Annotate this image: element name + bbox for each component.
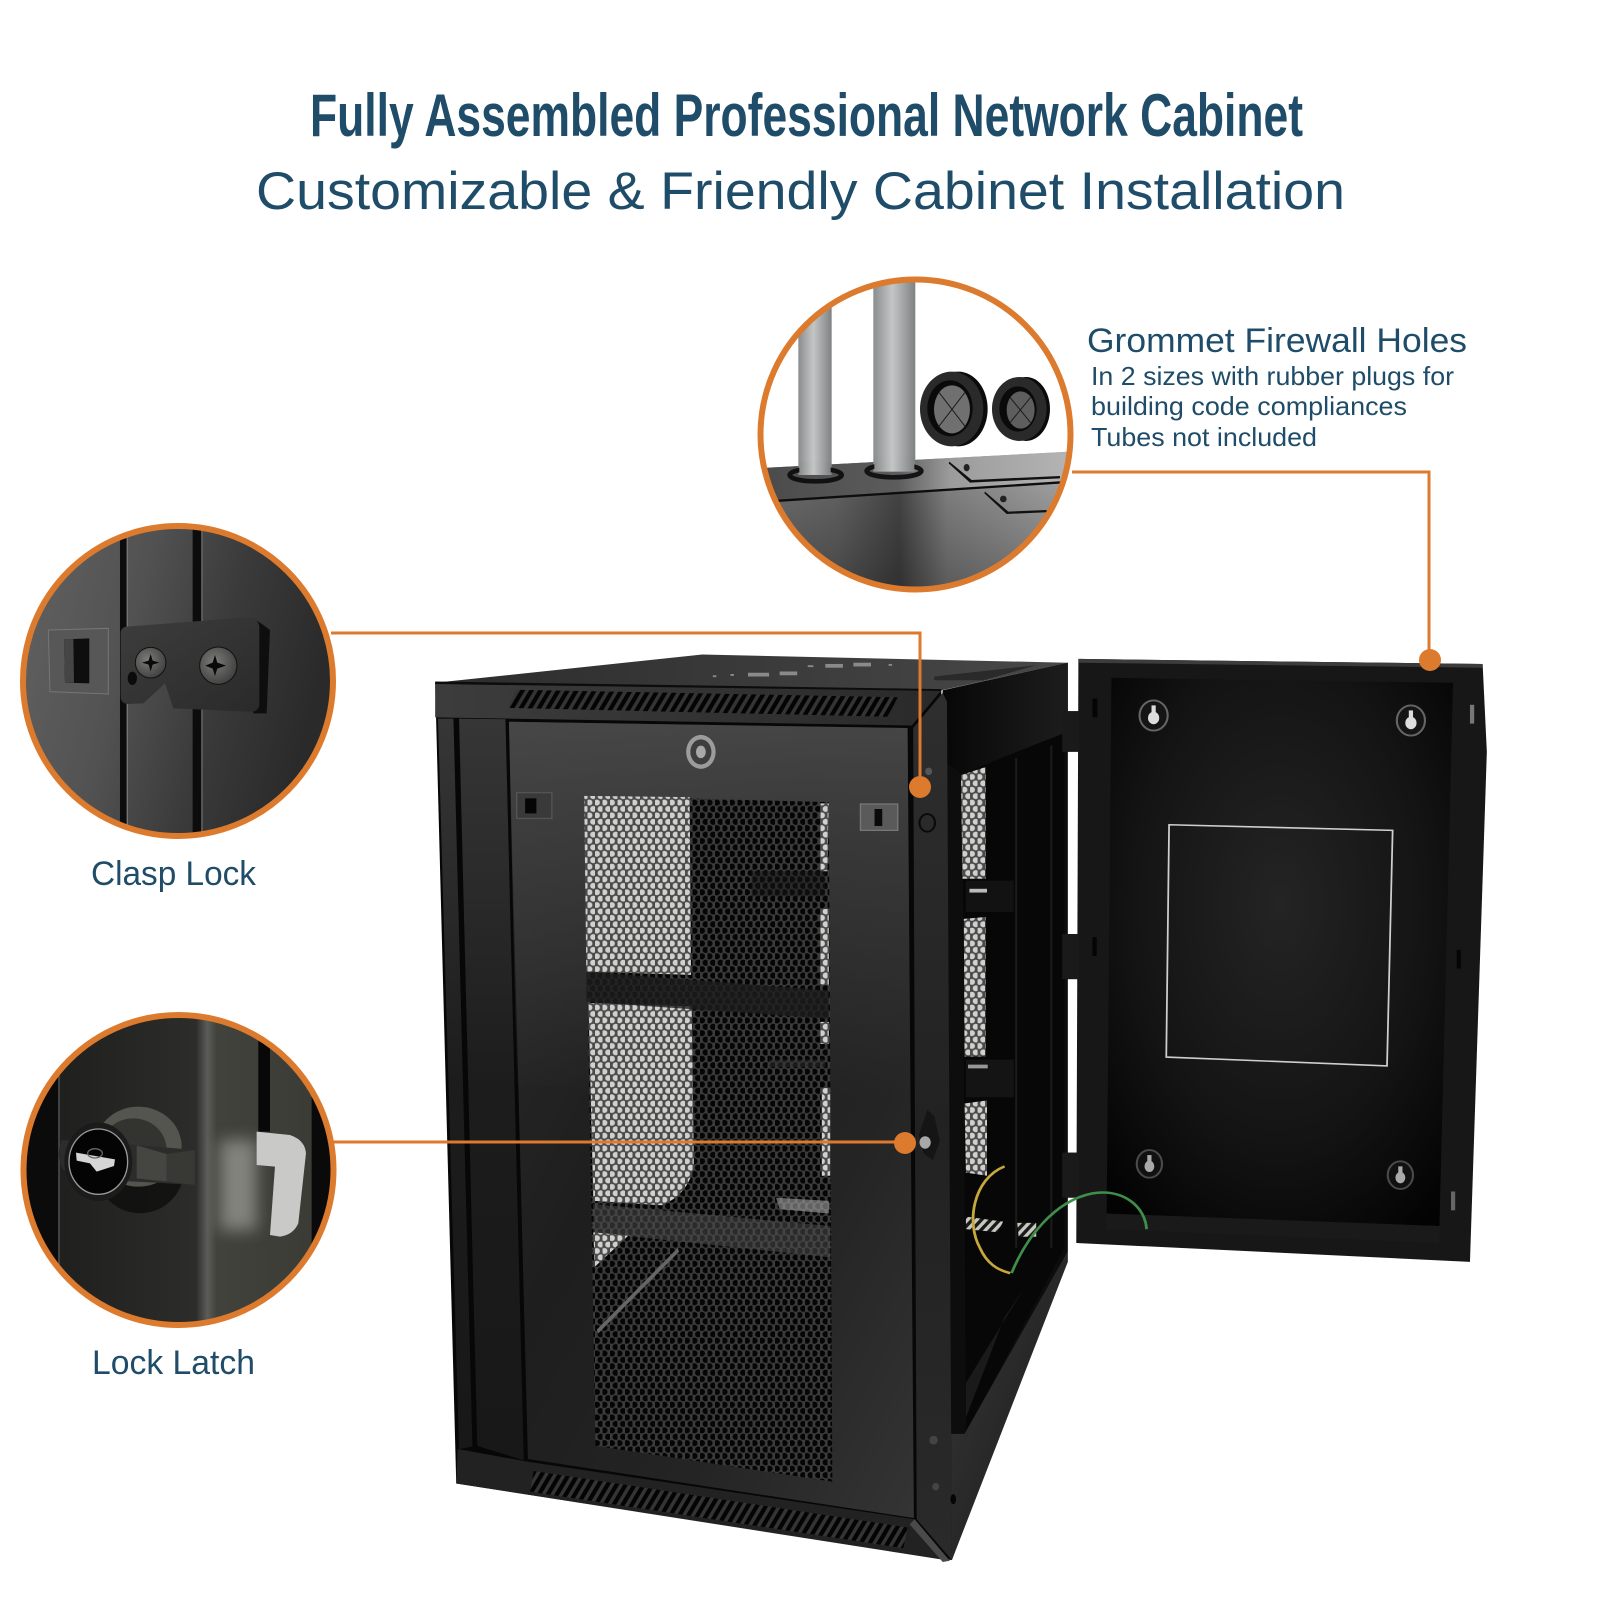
door handles [517,793,898,830]
small grommet [992,377,1050,441]
backing [435,683,952,1560]
pillar hardware [920,814,935,832]
label: clasp lock: Clasp Lock [91,855,257,893]
grommet description line 3: Tubes not included [1091,422,1317,452]
top band [435,683,941,726]
interior mesh strips [961,767,986,879]
grommet text block [1087,322,1467,452]
open side door of the cabinet [1076,659,1487,1262]
door knob [919,1110,940,1160]
door lock [686,735,716,769]
connector dot: clasp lock [909,776,931,798]
label: lock latch: Lock Latch [92,1344,255,1382]
connector line: grommet holes [1072,472,1429,660]
door mesh [584,796,832,1482]
grommet description line 2: building code compliances [1091,391,1407,421]
base [456,1449,950,1561]
grommet heading: Grommet Firewall Holes [1087,322,1467,360]
connector line: clasp lock [331,633,920,787]
front cabinet body [435,655,1147,1562]
keyhole mounts [1137,700,1425,1189]
callout: grommet firewall holes circle [755,275,1080,595]
callout: lock latch circle [20,1010,340,1330]
side wall [943,663,1068,1560]
door [509,722,914,1518]
large grommet [920,372,988,446]
connector dot: grommet holes [1419,649,1441,671]
callout: clasp lock circle [20,520,340,840]
left frames [438,719,472,1449]
wires [973,1166,1147,1273]
right pillar [913,693,952,1560]
knockout panel outline [1166,825,1393,1066]
connector dot: lock latch [894,1132,916,1154]
hinges [1062,711,1079,752]
grommet description line 1: In 2 sizes with rubber plugs for [1091,361,1454,391]
interior rails behind mesh [586,972,829,1019]
subtitle: Customizable & Friendly Cabinet Installation [256,162,1345,221]
top surface [435,655,1068,690]
connector line: lock latch [333,1140,905,1144]
